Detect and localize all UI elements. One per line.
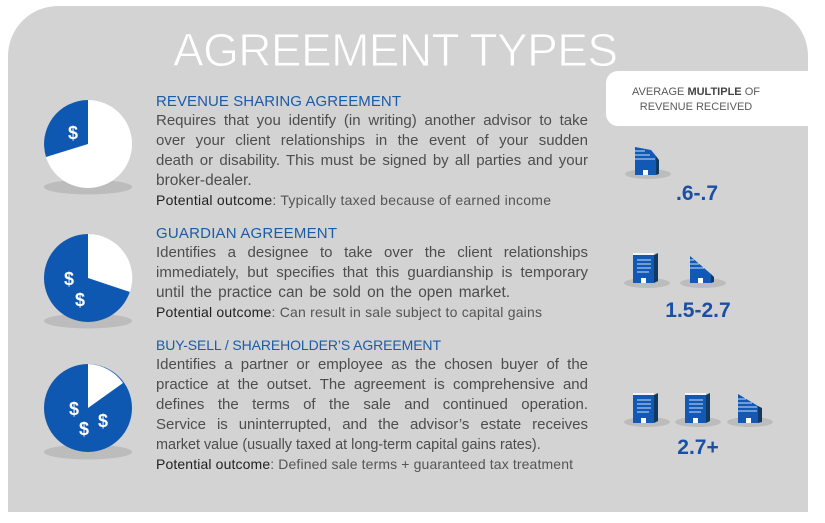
text block: revenue sharing description: Requires that you identify (in writing) another advisor to take [156,112,588,129]
icon: pie chart with two dollar signs: $ [64,269,74,289]
text block: revenue sharing potential outcome: Potential outcome: Typically taxed because of earned income [156,192,551,208]
chart: multiple 2.7+ [624,393,773,459]
text block: guardian description [156,243,596,303]
value: 2.7+: 2.7+ [677,436,719,459]
icon: pie chart with two dollar signs [44,234,132,328]
text block: revenue sharing description: broker-dealer. [156,172,252,189]
text block: buy-sell description: defines the terms of the sale and continued operation. [156,396,588,413]
icon: partial building [680,256,726,288]
text block: buy-sell description: Service is uninterrupted, and the advisor’s estate receives [156,416,588,433]
icon: pie chart with one dollar sign: $ [68,123,78,143]
panel: guardian agreement [44,225,596,328]
text block: guardian description: until the practice can be sold on the open market. [156,284,510,301]
icon: pie chart with three dollar signs: $ [69,399,79,419]
text block: buy-sell description: practice at the outset. The agreement is comprehensive and [156,376,588,393]
text block: buy-sell description: market value (usually taxed at long-term capital gains rates). [156,437,541,453]
icon: pie chart with three dollar signs [44,364,132,460]
panel: revenue sharing agreement [44,93,596,208]
icon: pie chart with three dollar signs: $ [79,419,89,439]
text block: buy-sell potential outcome: Potential outcome: Defined sale terms + guaranteed tax treatment [156,456,573,472]
icon: partial building [727,394,773,427]
chart: multiple 1.5-2.7 [624,253,731,322]
text block: buy-sell description [156,355,596,455]
icon: partial building [625,147,671,179]
callout: average multiple of revenue received [606,71,808,126]
callout: average multiple of revenue received: AVERAGE MULTIPLE OF [632,86,760,98]
icon: pie chart with two dollar signs: $ [75,290,85,310]
heading: revenue sharing agreement: REVENUE SHARING AGREEMENT [156,93,401,110]
heading: guardian agreement: GUARDIAN AGREEMENT [156,225,337,242]
text block: revenue sharing description: death or disability. This must be signed by all parties and your [156,152,588,169]
callout: average multiple of revenue received: REVENUE RECEIVED [640,101,752,113]
icon: pie chart with three dollar signs: $ [98,411,108,431]
title: AGREEMENT TYPES [173,24,618,76]
text block: guardian description: Identifies a designee to take over the client relationships [156,244,588,261]
icon: pie chart with one dollar sign [44,100,132,194]
text block: buy-sell description: Identifies a partner or employee as the chosen buyer of the [156,356,588,373]
text block: guardian description: immediately, but specifies that this guardianship is temporary [156,264,588,281]
heading: buy-sell / shareholder's agreement: BUY-SELL / SHAREHOLDER’S AGREEMENT [156,337,441,353]
value: .6-.7: .6-.7 [676,182,718,205]
chart: multiple .6-.7 [625,147,718,205]
value: 1.5-2.7: 1.5-2.7 [665,299,731,322]
icon: full building [624,253,670,288]
text block: guardian potential outcome: Potential outcome: Can result in sale subject to capital gains [156,304,542,320]
panel: buy-sell shareholder's agreement [44,337,596,472]
icon: full building [675,393,721,427]
text block: revenue sharing description [156,111,596,191]
icon: full building [624,393,670,427]
text block: revenue sharing description: over your client relationships in the event of your sudden [156,132,588,149]
